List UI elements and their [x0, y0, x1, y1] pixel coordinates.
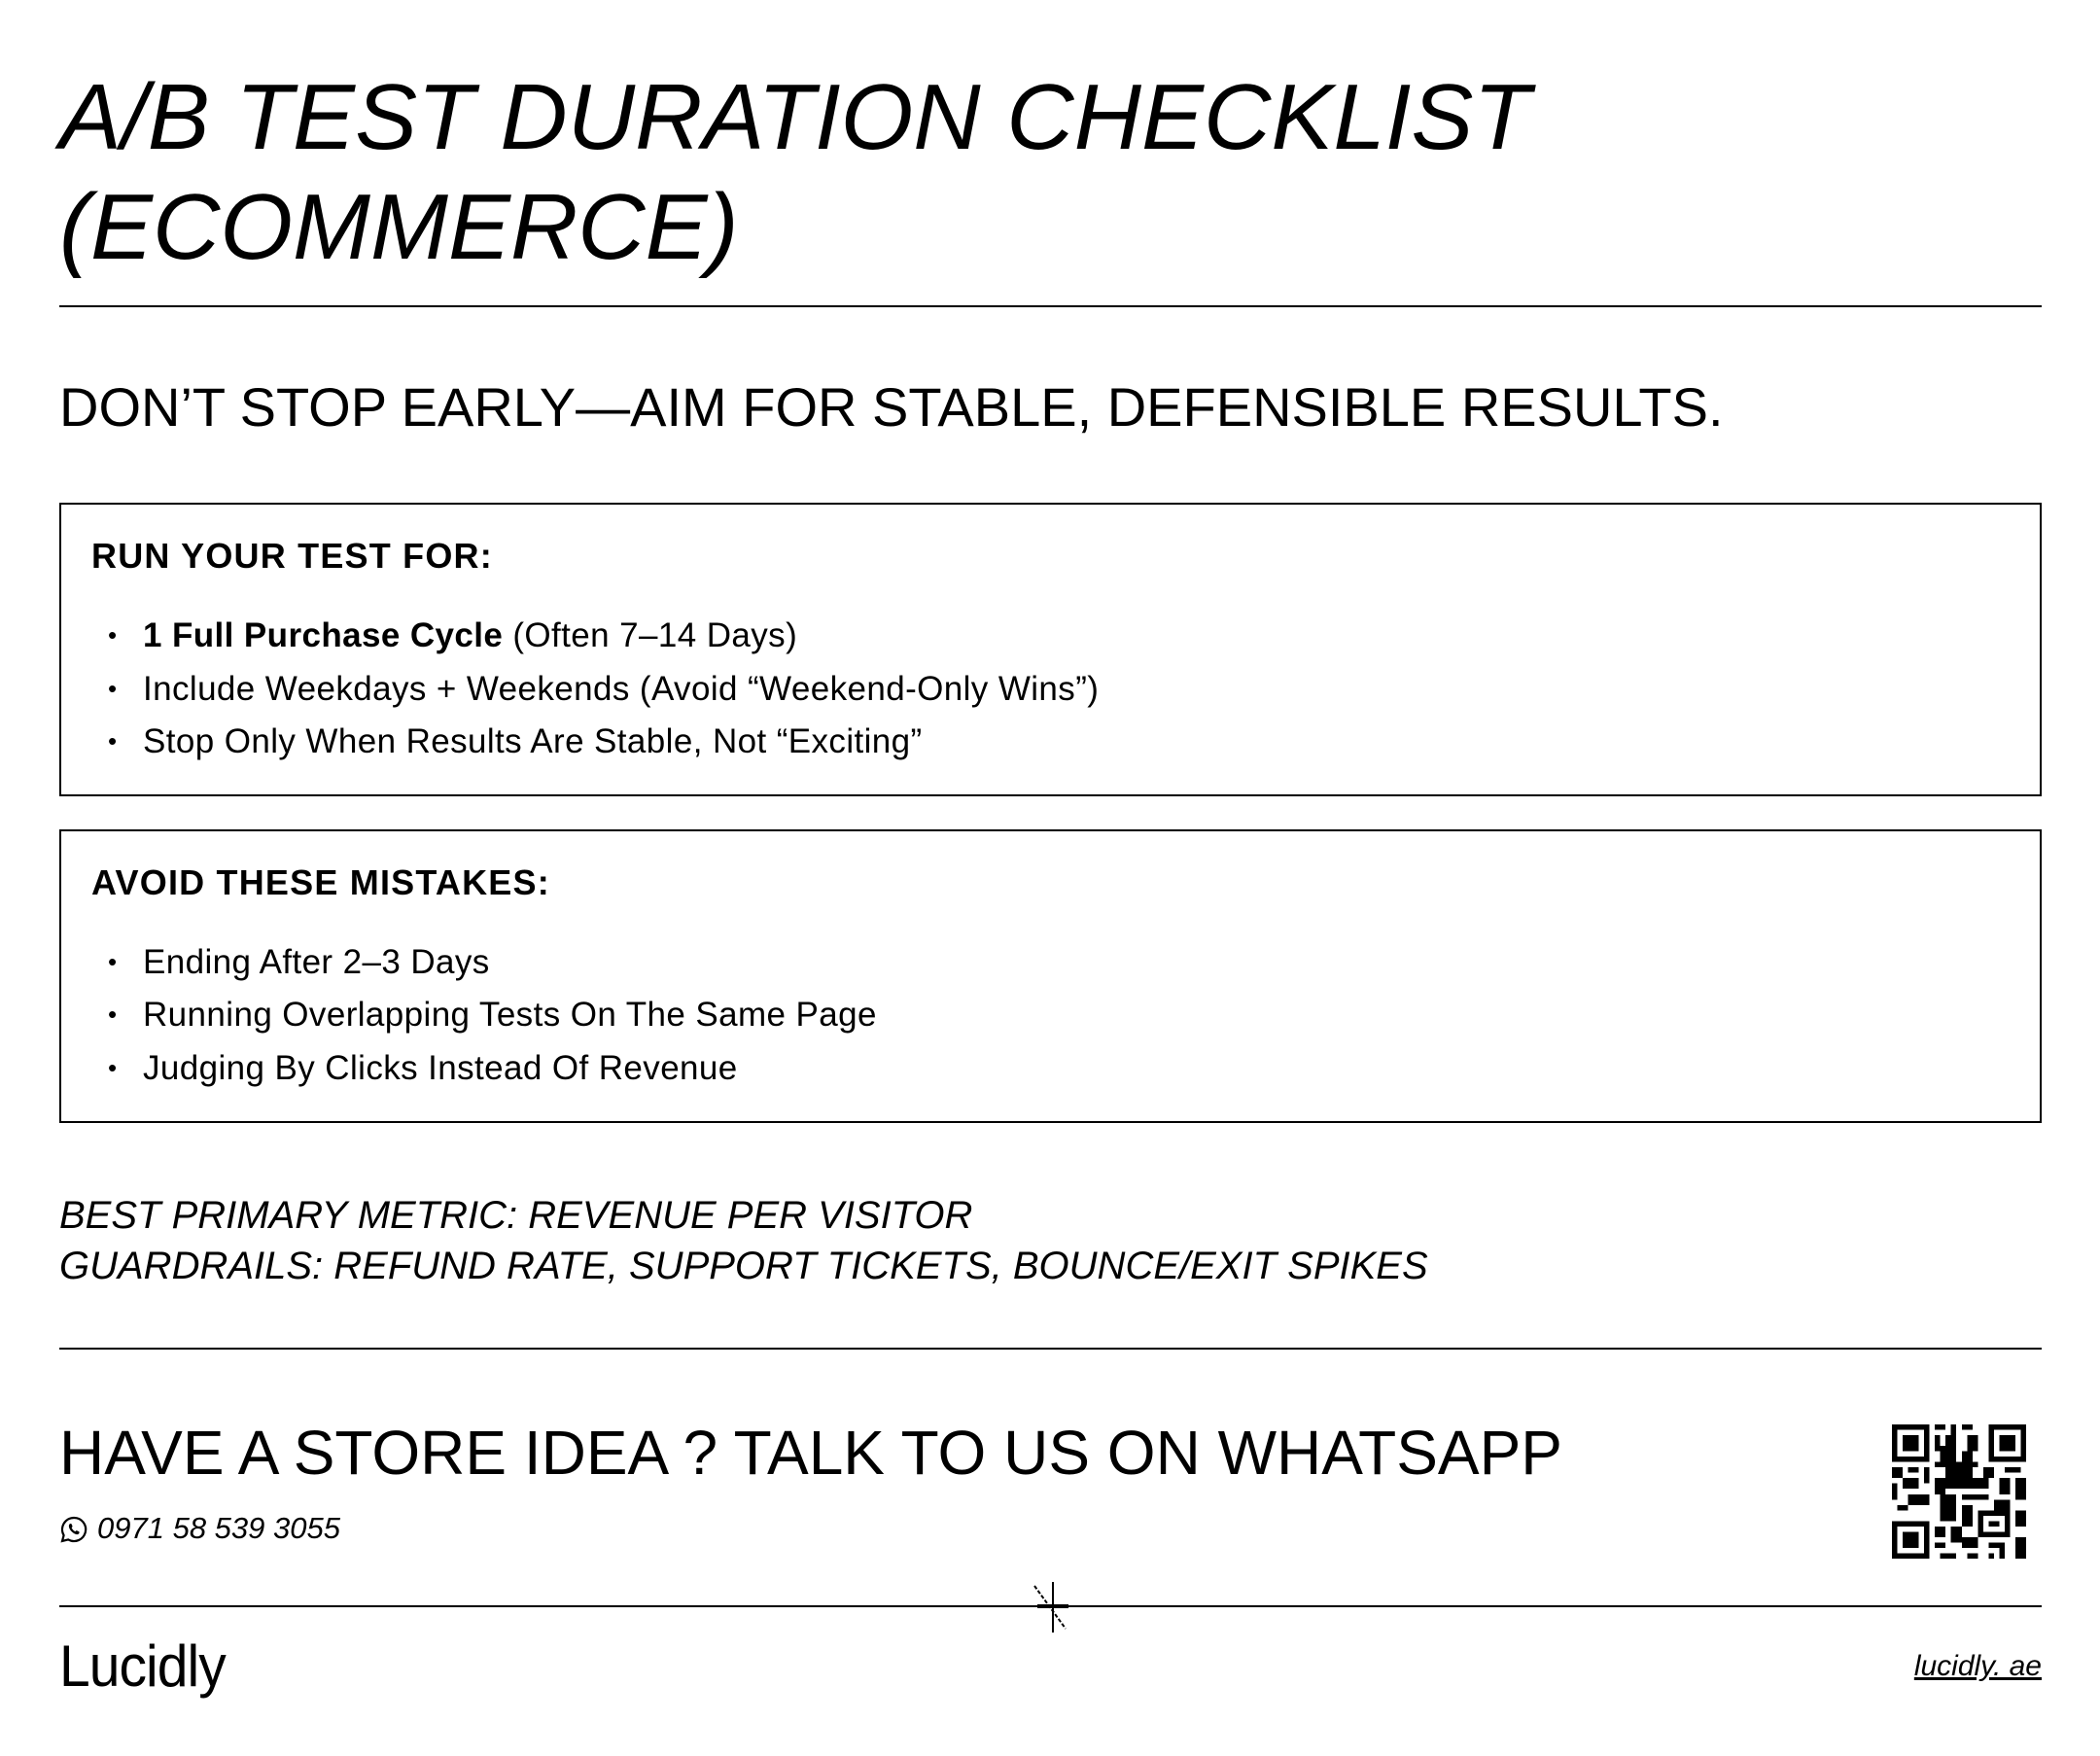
phone with whatsapp icon: 0971 58 539 3055	[97, 1511, 340, 1545]
heading: avoid these mistakes: AVOID THESE MISTAKES:	[91, 862, 550, 902]
qr code	[1892, 1424, 2026, 1559]
bullet list: 1 Full Purchase Cycle (Often 7–14 Days)	[143, 616, 797, 654]
bullet list: Ending After 2–3 Days	[143, 943, 490, 981]
website link: lucidly. ae	[1914, 1650, 2042, 1682]
metrics text	[59, 1194, 1428, 1287]
panel: run your test for	[59, 503, 2042, 796]
subtitle: DON’T STOP EARLY—AIM FOR STABLE, DEFENSIBLE RESULTS.	[59, 376, 1724, 438]
bullet list	[108, 616, 1099, 760]
metrics text: GUARDRAILS: REFUND RATE, SUPPORT TICKETS, BOUNCE/EXIT SPIKES	[59, 1245, 1428, 1287]
title: (ECOMMERCE)	[59, 175, 739, 279]
panel: avoid these mistakes	[59, 829, 2042, 1123]
panel: run your test for: •	[108, 620, 118, 650]
bullet list: Stop Only When Results Are Stable, Not “Exciting”	[143, 722, 923, 760]
bullet list	[108, 943, 877, 1087]
panel: avoid these mistakes: •	[108, 1000, 118, 1029]
title	[54, 65, 1536, 279]
bullet list: Judging By Clicks Instead Of Revenue	[143, 1049, 738, 1087]
metrics text: BEST PRIMARY METRIC: REVENUE PER VISITOR	[59, 1194, 972, 1237]
heading: run your test for: RUN YOUR TEST FOR:	[91, 536, 493, 576]
bullet list: Include Weekdays + Weekends (Avoid “Weekend-Only Wins”)	[143, 670, 1099, 708]
panel: avoid these mistakes: •	[108, 1053, 118, 1082]
icon: cross mark	[1033, 1582, 1068, 1633]
icon: whatsapp	[60, 1517, 88, 1542]
call to action: HAVE A STORE IDEA ? TALK TO US ON WHATSAPP	[59, 1418, 1562, 1488]
panel: run your test for: •	[108, 726, 118, 755]
logo: Lucidly	[59, 1633, 226, 1699]
bullet list: Running Overlapping Tests On The Same Page	[143, 996, 877, 1034]
panel: avoid these mistakes: •	[108, 947, 118, 976]
title: A/B TEST DURATION CHECKLIST	[59, 65, 1530, 169]
panel: run your test for: •	[108, 674, 118, 703]
